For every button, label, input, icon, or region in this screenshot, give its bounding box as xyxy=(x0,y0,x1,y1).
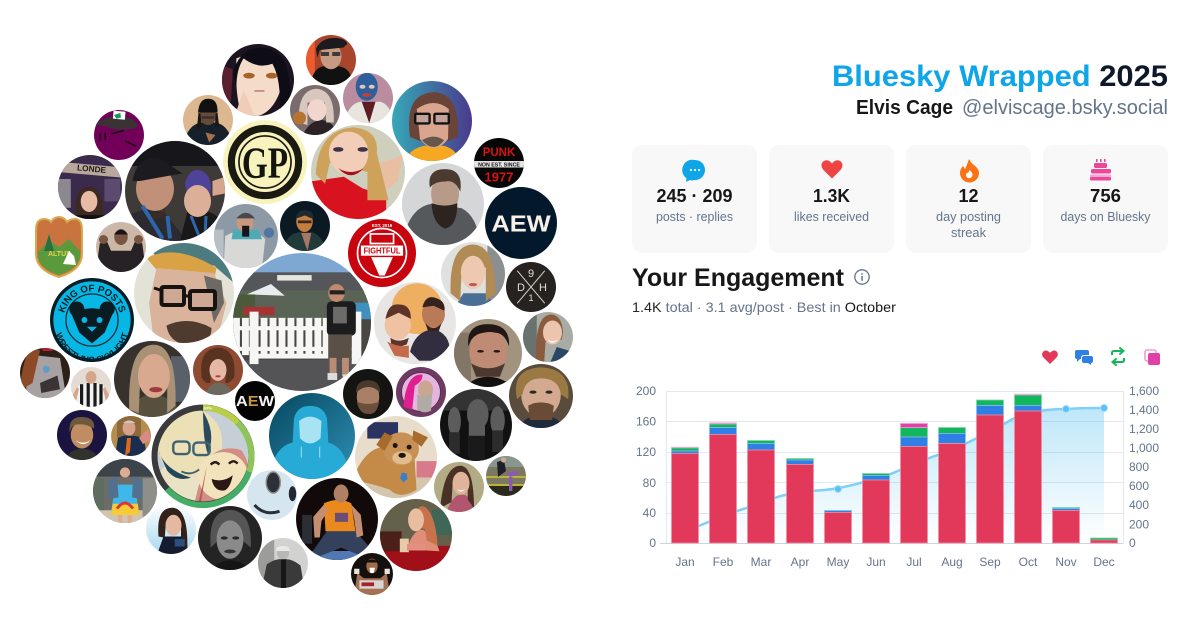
left axis labels: 120 xyxy=(636,445,656,459)
avatar: man in black beanie xyxy=(183,95,233,145)
avatar: woman with red blanket xyxy=(380,499,454,571)
left axis labels: 80 xyxy=(643,476,656,490)
right axis labels: 1,400 xyxy=(1129,403,1159,417)
avatar: smiling woman with long hair xyxy=(523,312,573,362)
avatar: man in backwards cap xyxy=(306,35,356,85)
right axis labels: 1,000 xyxy=(1129,441,1159,455)
month labels: Jun xyxy=(866,555,886,569)
right axis labels: 0 xyxy=(1129,536,1136,550)
avatar: masked luchador xyxy=(343,73,393,123)
avatar: illustrated couple with progress ring xyxy=(154,406,252,505)
stat value: 756 xyxy=(1090,186,1121,206)
avatar: Fightful red logo: FIGHTFUL xyxy=(364,246,400,256)
month labels xyxy=(675,555,1115,569)
panel: likes stat xyxy=(769,145,894,253)
stat label: day posting xyxy=(936,209,1001,224)
chart legend xyxy=(1042,348,1160,365)
stat label: days on Bluesky xyxy=(1060,209,1151,224)
avatar: man in black shirt gesturing xyxy=(96,222,146,272)
user name: Elvis Cage xyxy=(856,97,953,119)
avatar: Alt US National Park Service badge: ALTUS xyxy=(48,251,71,258)
month labels: Sep xyxy=(979,555,1001,569)
avatar: red haired woman in grey tee xyxy=(20,348,70,398)
avatar: woman with long brown hair xyxy=(434,462,484,512)
avatar: wrestler on ring ropes xyxy=(486,456,526,496)
avatar: AEW black logo xyxy=(235,381,275,421)
title: Bluesky Wrapped 2025: Bluesky Wrapped 2025 xyxy=(832,60,1168,93)
avatar: AEW dark logo: AEW xyxy=(491,211,551,237)
avatar: blonde woman with burger xyxy=(290,85,340,135)
icon: likes legend xyxy=(1042,350,1058,364)
avatar: Punk non est since 1977 logo: 1977 xyxy=(485,170,513,184)
avatar: D 9 H 1 logo: 1 xyxy=(528,293,534,303)
stat value: 12 xyxy=(958,186,978,206)
avatar: D 9 H 1 logo xyxy=(506,262,556,312)
stat label: posts · replies xyxy=(656,209,733,224)
avatar: woman under Londe marquee xyxy=(58,155,124,222)
avatar: Alt US National Park Service badge xyxy=(36,217,82,277)
avatar: blonde woman in blue xyxy=(441,242,505,306)
bars: replies xyxy=(672,406,1080,514)
avatar: woman in red dress xyxy=(311,125,405,219)
month labels: May xyxy=(827,555,849,569)
header title xyxy=(832,60,1168,119)
left axis labels: 40 xyxy=(643,506,656,520)
user handle: @elviscage.bsky.social xyxy=(962,97,1168,119)
heading: Your Engagement: Your Engagement xyxy=(632,264,845,292)
icon: heart xyxy=(822,160,842,178)
stat label second line: streak xyxy=(951,225,986,240)
icon: quotes legend xyxy=(1145,350,1160,365)
panel: days on Bluesky stat xyxy=(1043,145,1168,253)
avatar: referee xyxy=(71,367,111,407)
avatar: woman under Londe marquee: LONDE xyxy=(77,162,107,175)
right axis labels: 1,200 xyxy=(1129,422,1159,436)
stat value: 245 · 209 xyxy=(656,186,732,206)
avatar: Punk non est since 1977 logo: PUNK xyxy=(483,147,516,159)
avatar: King of Posts panda logo: KING OF POSTS xyxy=(58,284,126,312)
avatar: AEW dark logo xyxy=(485,187,557,259)
avatar: Fightful red logo: EST. 2016 xyxy=(372,223,393,228)
cumulative area xyxy=(685,408,1104,543)
avatar: illustrated man on dark teal xyxy=(280,201,330,251)
bars: quotes xyxy=(672,394,1042,448)
icon: info xyxy=(855,270,869,284)
avatar: woman in rainbow dress xyxy=(93,459,157,523)
avatar: black and white wrestling group xyxy=(440,389,512,461)
left axis labels: 0 xyxy=(649,536,656,550)
month labels: Oct xyxy=(1019,555,1038,569)
avatar: Punk non est since 1977 logo: NON EST. SINCE xyxy=(478,162,520,168)
right axis labels: 600 xyxy=(1129,479,1149,493)
left axis labels xyxy=(636,384,656,550)
engagement summary: 1.4K total · 3.1 avg/post · Best in October xyxy=(632,299,896,315)
avatar: man with glasses on teal purple background xyxy=(392,81,472,161)
avatar: purple cartoon character xyxy=(94,110,144,160)
panel: posting streak stat xyxy=(906,145,1031,253)
stat value: 1.3K xyxy=(813,186,850,206)
avatar: woman with dark hair on light blue xyxy=(146,504,196,554)
avatar: Fightful red logo xyxy=(348,219,416,287)
right axis labels: 200 xyxy=(1129,518,1149,532)
avatar: D 9 H 1 logo: 9 xyxy=(528,268,534,280)
avatar: couple at convention xyxy=(125,141,228,241)
avatar: bearded man in grey jacket xyxy=(402,163,484,245)
avatar: man in suit pointing xyxy=(111,416,151,456)
bars: reposts xyxy=(672,395,1118,541)
avatar: hooded figure xyxy=(269,393,355,479)
avatar: smiling man on purple xyxy=(57,410,107,460)
right axis labels: 800 xyxy=(1129,460,1149,474)
avatar: D 9 H 1 logo: D xyxy=(517,282,525,294)
avatar: golden dog xyxy=(355,416,437,498)
avatar: curly haired woman by brick wall xyxy=(193,345,243,395)
avatar bubble cluster xyxy=(20,35,573,595)
month labels: Jul xyxy=(906,555,922,569)
gridlines xyxy=(666,391,1124,544)
cumulative line xyxy=(685,408,1104,531)
avatar: illustrated duo on orange background xyxy=(374,282,456,364)
right axis labels: 1,600 xyxy=(1129,384,1159,398)
avatar: wrestler in orange tank top xyxy=(296,478,378,561)
bars: likes xyxy=(672,411,1118,543)
avatar: man with dark hair xyxy=(454,319,522,387)
month labels: Nov xyxy=(1055,555,1077,569)
avatar: illustrated couple with progress ring: 63% xyxy=(204,406,212,410)
avatar: man with curly hair xyxy=(509,364,573,428)
avatar: grayscale speaker with microphone xyxy=(258,538,308,588)
avatar: anime character xyxy=(222,44,294,116)
avatar: man taking mirror selfie xyxy=(214,204,278,268)
avatar: D 9 H 1 logo: H xyxy=(539,282,547,294)
stat label: likes received xyxy=(794,209,869,224)
avatar: GP sketch logo xyxy=(223,120,307,204)
line points xyxy=(834,404,1108,492)
avatar: King of Posts panda logo: WRESTLING SKYLIGHT xyxy=(56,332,128,362)
avatar: AEW black logo: AEW xyxy=(236,394,274,410)
avatar: woman selfie xyxy=(114,341,190,417)
avatar: bearded man in the dark xyxy=(343,369,393,419)
avatar: soccer ball face xyxy=(247,470,297,520)
avatar: pink haired bearded illustration xyxy=(396,367,446,417)
avatar: Punk non est since 1977 logo xyxy=(474,138,524,188)
icon: speech bubble xyxy=(682,160,705,182)
left axis labels: 200 xyxy=(636,384,656,398)
avatar: man in front of white picket fence xyxy=(233,253,372,395)
month labels: Jan xyxy=(675,555,695,569)
avatar: King of Posts panda logo xyxy=(50,278,134,362)
month labels: Dec xyxy=(1093,555,1115,569)
icon: flame xyxy=(960,159,979,182)
icon: birthday cake xyxy=(1090,159,1111,180)
right axis labels xyxy=(1129,384,1159,550)
right axis labels: 400 xyxy=(1129,498,1149,512)
panel: posts and replies stat xyxy=(632,145,757,253)
month labels: Mar xyxy=(751,555,771,569)
avatar: GP sketch logo: GP xyxy=(242,138,288,188)
avatar: shouting wrestler xyxy=(351,553,393,595)
icon: reposts legend xyxy=(1112,348,1124,365)
left axis labels: 160 xyxy=(636,414,656,428)
avatar: grayscale woman xyxy=(198,506,262,570)
avatar: man with glasses close up xyxy=(134,243,234,346)
icon: replies legend xyxy=(1075,350,1093,365)
month labels: Apr xyxy=(791,555,809,569)
month labels: Aug xyxy=(941,555,963,569)
stacked bar chart with cumulative line xyxy=(636,384,1159,569)
month labels: Feb xyxy=(713,555,734,569)
